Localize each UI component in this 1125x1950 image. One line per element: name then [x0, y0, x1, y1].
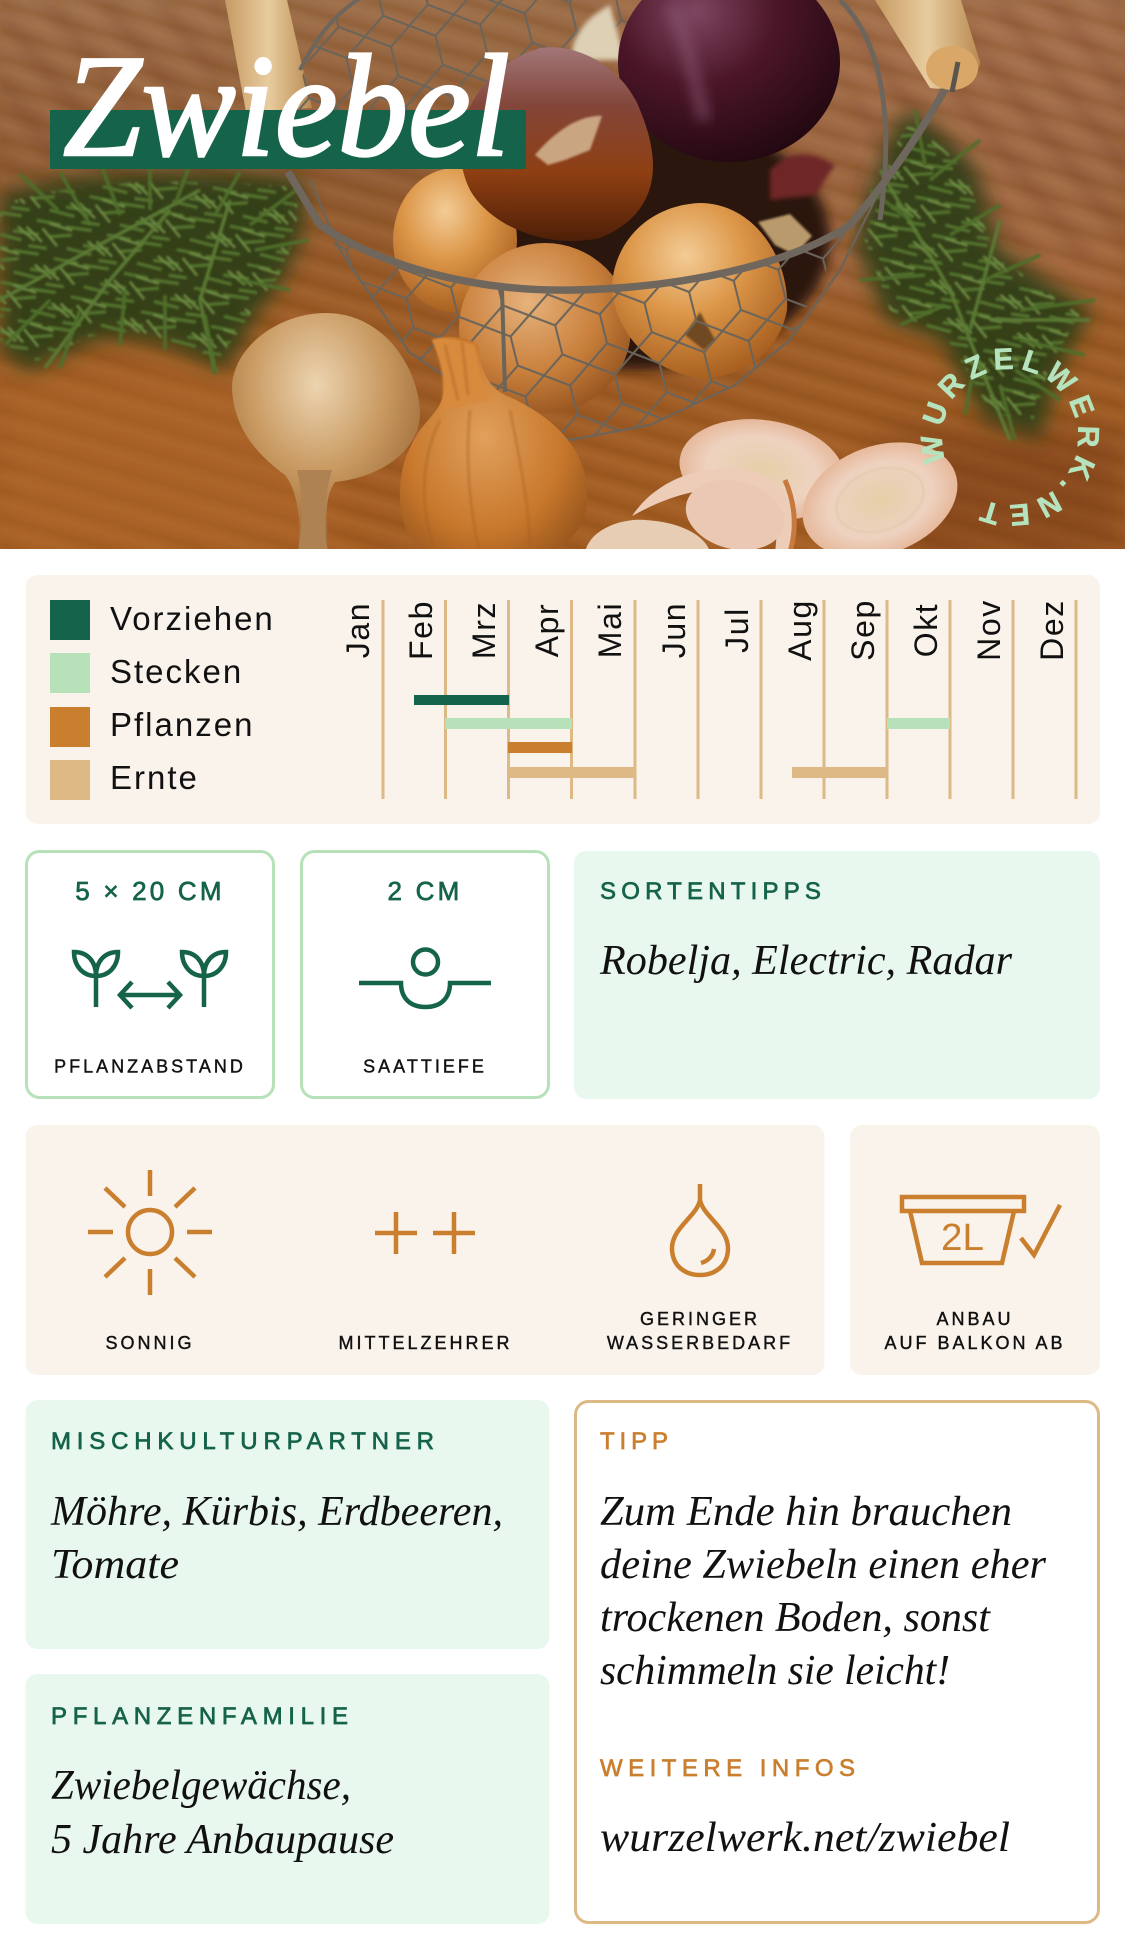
panel: pflanzenfamilie: Zwiebelgewächse, [51, 1763, 351, 1809]
panel: sortentipps: Robelja, Electric, Radar [599, 938, 1013, 984]
onion middle [459, 243, 631, 413]
month labels: Mrz [466, 601, 502, 659]
panel: saattiefe [302, 852, 548, 1098]
panel: mischkulturpartner [26, 1400, 550, 1649]
panel: pflanzenfamilie [26, 1674, 550, 1924]
panel: balkon [850, 1125, 1100, 1375]
month labels: Jul [719, 607, 755, 653]
onion tuft [758, 214, 812, 255]
front onion [400, 337, 587, 560]
small red onion behind [770, 154, 835, 200]
panel: sortentipps [574, 851, 1100, 1099]
basket handle left [225, 0, 312, 112]
month labels: Aug [782, 599, 818, 661]
basket handle right [875, 0, 980, 92]
panel: balkon: AUF BALKON AB [884, 1333, 1066, 1353]
month labels [340, 599, 1070, 661]
papery skin [535, 116, 602, 165]
panel: standort and needs: MITTELZEHRER [338, 1333, 513, 1353]
panel: sortentipps: SORTENTIPPS [600, 878, 826, 905]
panel: tipp and infos [576, 1402, 1098, 1922]
onion right [612, 203, 787, 378]
panel: pflanzenfamilie: PFLANZENFAMILIE [51, 1703, 348, 1730]
wire mesh [310, 180, 885, 440]
legend [50, 600, 275, 800]
bars: ernte [508, 767, 887, 778]
legend: Stecken [110, 653, 243, 690]
rosemary left [0, 162, 308, 374]
month labels: Sep [845, 599, 881, 661]
tip text: Zum Ende hin brauchen [600, 1489, 1012, 1535]
panel: tipp and infos: WEITERE INFOS [600, 1755, 855, 1782]
panel: pflanzabstand: PFLANZABSTAND [54, 1056, 246, 1076]
basket rim [288, 70, 955, 290]
photo: onions in wire basket [0, 0, 1125, 549]
panel: pflanzenfamilie: 5 Jahre Anbaupause [51, 1817, 394, 1863]
rosemary right [855, 110, 1095, 440]
panel: tipp and infos: TIPP [600, 1428, 668, 1455]
month labels: Okt [908, 603, 944, 657]
legend: Pflanzen [110, 706, 254, 743]
title: Zwiebel [63, 25, 510, 187]
icon: two seedlings with arrow [74, 952, 226, 1008]
dark red onion [618, 0, 840, 162]
panel: pflanzabstand [26, 852, 274, 1098]
panel: standort and needs: GERINGER [640, 1309, 760, 1329]
month labels: Apr [529, 603, 565, 657]
bars: stecken [445, 718, 950, 729]
panel: mischkulturpartner: Tomate [51, 1542, 179, 1588]
panel: standort and needs: SONNIG [105, 1333, 195, 1353]
red brown onion [461, 47, 653, 241]
icon: plus signs [375, 1212, 475, 1254]
garlic [572, 5, 625, 60]
bar: pflanzen [508, 742, 572, 753]
panel: saattiefe: SAATTIEFE [363, 1056, 487, 1076]
month labels: Mai [592, 602, 628, 658]
wurzelwerk circular logo text: WURZELWERK.NET [920, 348, 1100, 526]
panel: balkon: ANBAU [936, 1309, 1014, 1329]
title band [50, 110, 526, 169]
basket back mesh [295, 0, 886, 220]
panel: standort and needs: WASSERBEDARF [607, 1333, 793, 1353]
month labels: Jan [340, 602, 376, 658]
onion slices [586, 419, 958, 549]
tip text: schimmeln sie leicht! [600, 1648, 950, 1694]
panel: sowing calendar [26, 575, 1100, 824]
panel: saattiefe: 2 CM [388, 876, 462, 906]
month labels: Feb [403, 600, 439, 660]
month labels: Nov [971, 599, 1007, 661]
month labels: Dez [1034, 599, 1070, 661]
bar: vorziehen [414, 695, 509, 705]
tip text: deine Zwiebeln einen eher [600, 1542, 1047, 1588]
month labels: Jun [656, 602, 692, 658]
tip text [600, 1489, 1047, 1694]
panel: mischkulturpartner: MISCHKULTURPARTNER [51, 1428, 434, 1455]
legend: Vorziehen [110, 600, 275, 637]
icon: water drop [672, 1184, 728, 1275]
tip text: trockenen Boden, sonst [600, 1595, 991, 1641]
panel: standort and needs [26, 1125, 824, 1375]
panel: tipp and infos: wurzelwerk.net/zwiebel [600, 1815, 1010, 1861]
icon: pot with check [902, 1197, 1060, 1263]
panel: mischkulturpartner: Möhre, Kürbis, Erdbeeren, [50, 1489, 503, 1535]
basket interior shadow [516, 130, 839, 380]
icon: sun [88, 1170, 212, 1295]
onion back left [393, 168, 517, 312]
pale onion [232, 313, 420, 552]
panel: balkon: 2L [941, 1217, 984, 1259]
icon: seed depth [359, 950, 491, 1007]
panel: pflanzabstand: 5 × 20 CM [75, 876, 225, 906]
legend: Ernte [110, 759, 199, 796]
